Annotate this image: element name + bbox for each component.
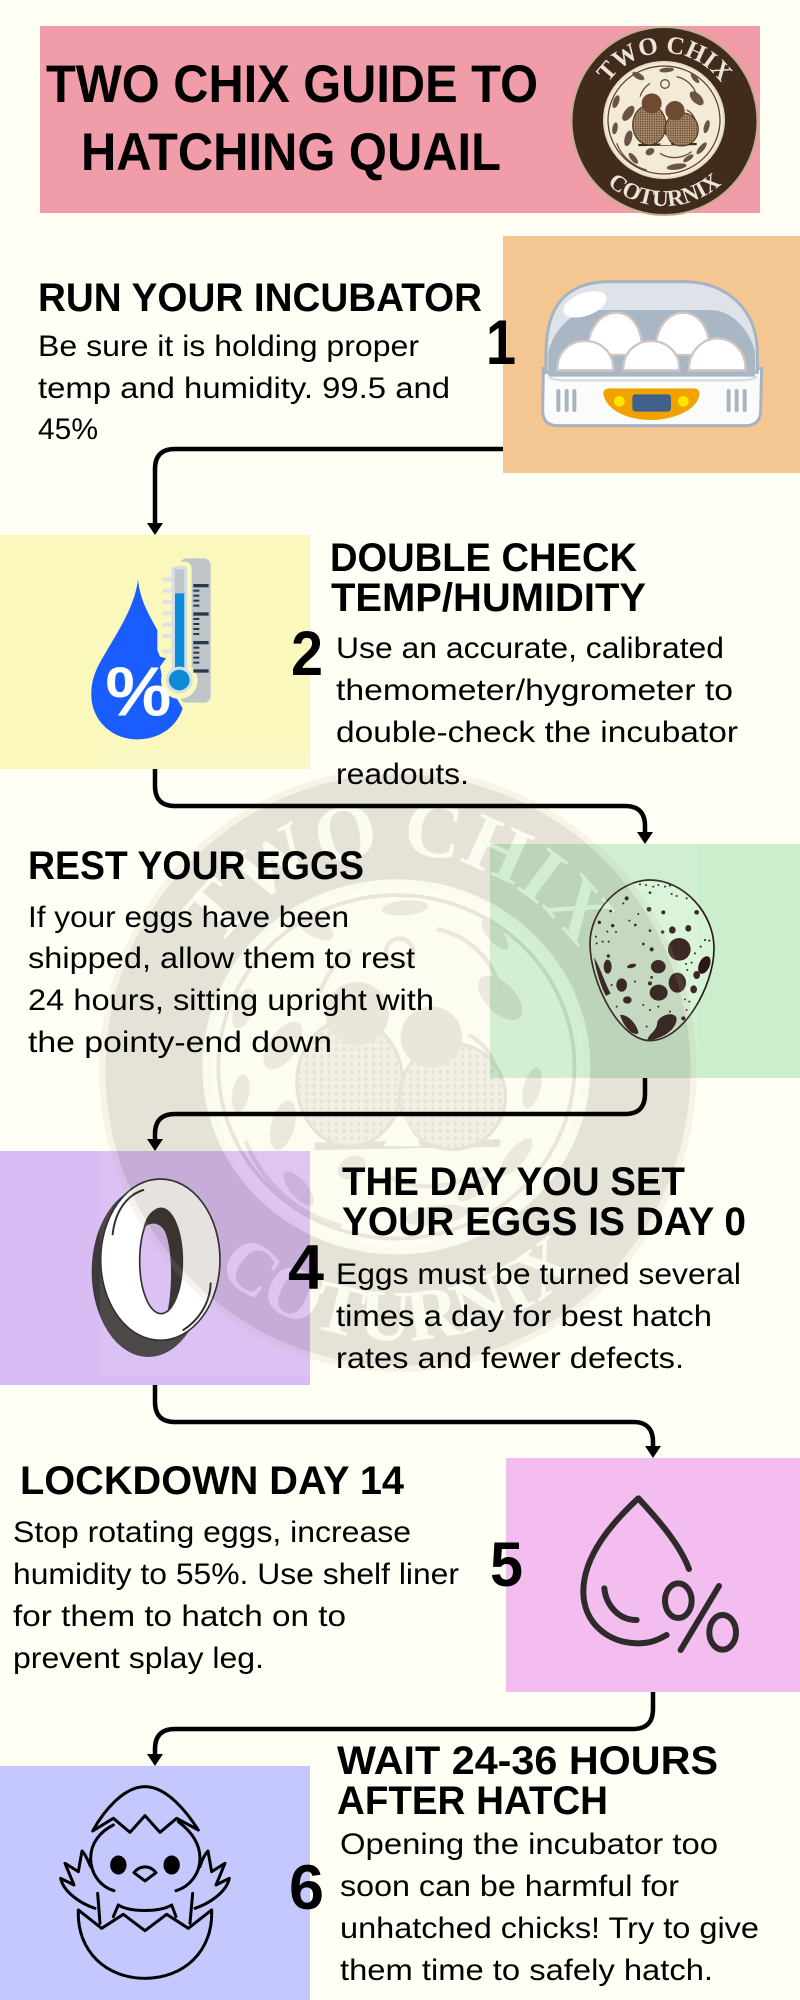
step 6 heading: WAIT 24-36 HOURS: [337, 1739, 718, 1783]
step 3 body: 24 hours, sitting upright with: [28, 984, 434, 1017]
step 6 body: Opening the incubator too: [340, 1828, 718, 1861]
step 5 body: prevent splay leg.: [13, 1642, 264, 1675]
panel: step 5 lockdown humidity: [506, 1458, 800, 1692]
step 5 body: Stop rotating eggs, increase: [13, 1516, 411, 1549]
step 3 body: shipped, allow them to rest: [28, 942, 416, 975]
panel: step 2 thermometer: [0, 535, 310, 769]
arrow: step 3 to step 4: [147, 1078, 645, 1151]
icon: chick hatching from egg: [61, 1787, 229, 1978]
step 4 body: times a day for best hatch: [336, 1300, 712, 1333]
step 1 body: temp and humidity. 99.5 and: [38, 372, 450, 405]
step 2 body: [336, 632, 738, 791]
icon: speckled quail egg: [590, 880, 714, 1041]
step 6 body: soon can be harmful for: [340, 1870, 679, 1903]
step 1 heading: RUN YOUR INCUBATOR: [38, 276, 482, 320]
step 4 heading: YOUR EGGS IS DAY 0: [342, 1200, 746, 1244]
panel: step 1 incubator: [503, 236, 800, 473]
title: TWO CHIX GUIDE TO: [46, 55, 538, 114]
step 6 heading: AFTER HATCH: [337, 1779, 608, 1823]
step 2 heading: [330, 536, 646, 620]
panel: step 6 hatching chick: [0, 1766, 310, 2000]
step 5 heading: LOCKDOWN DAY 14: [20, 1459, 405, 1503]
panel: step 3 quail egg: [490, 844, 800, 1078]
watermark: faded logo behind steps: COTURNIX: [227, 1235, 579, 1341]
step 2 body: themometer/hygrometer to: [336, 674, 733, 707]
step 6 heading: [337, 1739, 718, 1823]
icon: drop with percent sign: [583, 1498, 736, 1650]
step 1 body: Be sure it is holding proper: [38, 330, 419, 363]
step 2 body: readouts.: [336, 758, 469, 791]
step 3 body: [28, 901, 434, 1059]
step 2 body: Use an accurate, calibrated: [336, 632, 724, 665]
panel: step 4 day zero: [0, 1151, 310, 1385]
step 5 body: [13, 1516, 459, 1675]
step 3 body: If your eggs have been: [28, 901, 349, 934]
step 4 heading: [342, 1160, 746, 1244]
step 6 body: them time to safely hatch.: [340, 1954, 713, 1987]
step 5 number: 5: [490, 1530, 523, 1600]
logo: Two Chix Coturnix badge: TWO CHIX: [596, 37, 733, 82]
icon: incubator: [543, 282, 762, 426]
step 5 body: humidity to 55%. Use shelf liner: [13, 1558, 459, 1591]
step 6 number: 6: [289, 1853, 324, 1923]
watermark: faded logo behind steps: [99, 768, 699, 1372]
step 6 body: [340, 1828, 759, 1987]
step 4 number: 4: [288, 1233, 324, 1303]
step 4 body: rates and fewer defects.: [336, 1342, 684, 1375]
step 4 body: Eggs must be turned several: [336, 1258, 741, 1291]
icon: humidity drop and thermometer: [91, 558, 211, 739]
logo: Two Chix Coturnix badge: COTURNIX: [610, 172, 722, 206]
step 3 body: the pointy-end down: [28, 1026, 332, 1059]
icon: humidity drop and thermometer: %: [105, 653, 171, 731]
watermark: faded logo behind steps: TWO CHIX: [179, 808, 615, 947]
panel: title banner: [40, 26, 760, 216]
step 2 heading: TEMP/HUMIDITY: [331, 576, 646, 620]
step 3 heading: REST YOUR EGGS: [28, 844, 364, 888]
step 6 body: unhatched chicks! Try to give: [340, 1912, 759, 1945]
step 4 body: [336, 1258, 741, 1375]
arrow: step 5 to step 6: [147, 1692, 653, 1766]
icon: outlined zero: [92, 1179, 220, 1357]
step 5 body: for them to hatch on to: [13, 1600, 346, 1633]
title: HATCHING QUAIL: [81, 123, 501, 182]
step 2 body: double-check the incubator: [336, 716, 738, 749]
title: [46, 55, 538, 182]
arrow: step 1 to step 2: [147, 449, 503, 535]
step 2 number: 2: [291, 619, 323, 689]
arrow: step 4 to step 5: [155, 1385, 661, 1458]
step 4 heading: THE DAY YOU SET: [342, 1160, 685, 1204]
step 2 heading: DOUBLE CHECK: [330, 536, 637, 580]
logo: Two Chix Coturnix badge: [570, 26, 758, 216]
step 1 body: [38, 330, 450, 446]
step 1 number: 1: [486, 308, 516, 378]
arrow: step 2 to step 3: [155, 769, 653, 844]
step 1 body: 45%: [38, 413, 98, 446]
